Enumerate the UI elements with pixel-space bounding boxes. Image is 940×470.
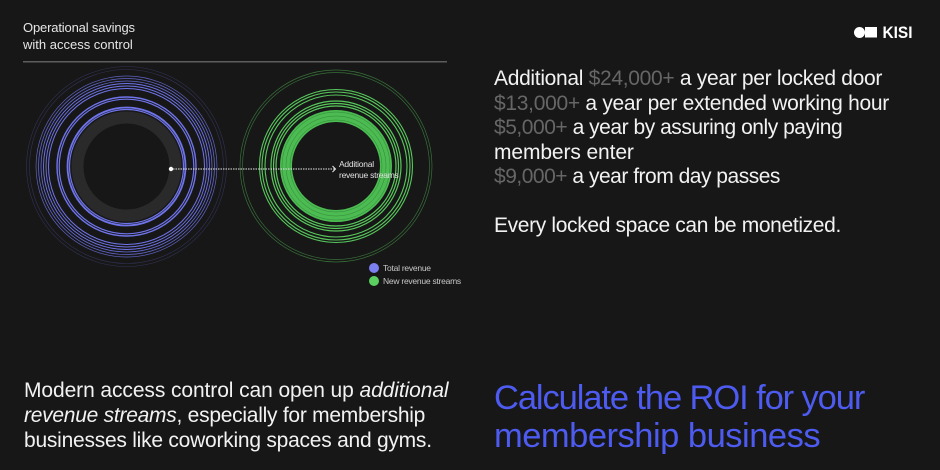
- legend: [369, 263, 461, 286]
- legend item: total revenue: Total revenue: [383, 263, 431, 273]
- savings list: [494, 67, 889, 188]
- summary text: revenue streams, especially for membership: [24, 404, 425, 427]
- call to action: membership business: [494, 417, 820, 455]
- chart: revenue rings: [23, 61, 447, 267]
- savings list: $5,000+ a year by assuring only paying: [494, 116, 842, 139]
- logo: kisi: [854, 23, 912, 41]
- savings list: $9,000+ a year from day passes: [494, 165, 780, 188]
- rings: new revenue streams: [240, 70, 432, 262]
- call to action: Calculate the ROI for your: [494, 379, 864, 417]
- call to action: [494, 379, 865, 455]
- heading: operational savings: [23, 20, 135, 52]
- heading: operational savings: with access control: [23, 36, 133, 52]
- summary text: Modern access control can open up additional: [24, 379, 448, 402]
- savings list: Additional $24,000+ a year per locked door: [494, 67, 882, 90]
- statement: every locked space: Every locked space can be monetized.: [494, 214, 841, 237]
- arrow: total to additional revenue: [169, 166, 336, 172]
- heading: operational savings: Operational savings: [23, 20, 135, 35]
- rings: total revenue: [26, 66, 226, 266]
- chart label: additional revenue streams: Additional: [339, 159, 374, 169]
- legend item: new revenue streams: New revenue streams: [383, 276, 461, 286]
- savings list: members enter: [494, 140, 634, 164]
- chart label: additional revenue streams: revenue streams: [339, 170, 399, 180]
- chart label: additional revenue streams: [339, 159, 399, 180]
- summary text: [24, 379, 449, 452]
- summary text: businesses like coworking spaces and gyms.: [24, 429, 432, 452]
- savings list: $13,000+ a year per extended working hour: [494, 92, 889, 114]
